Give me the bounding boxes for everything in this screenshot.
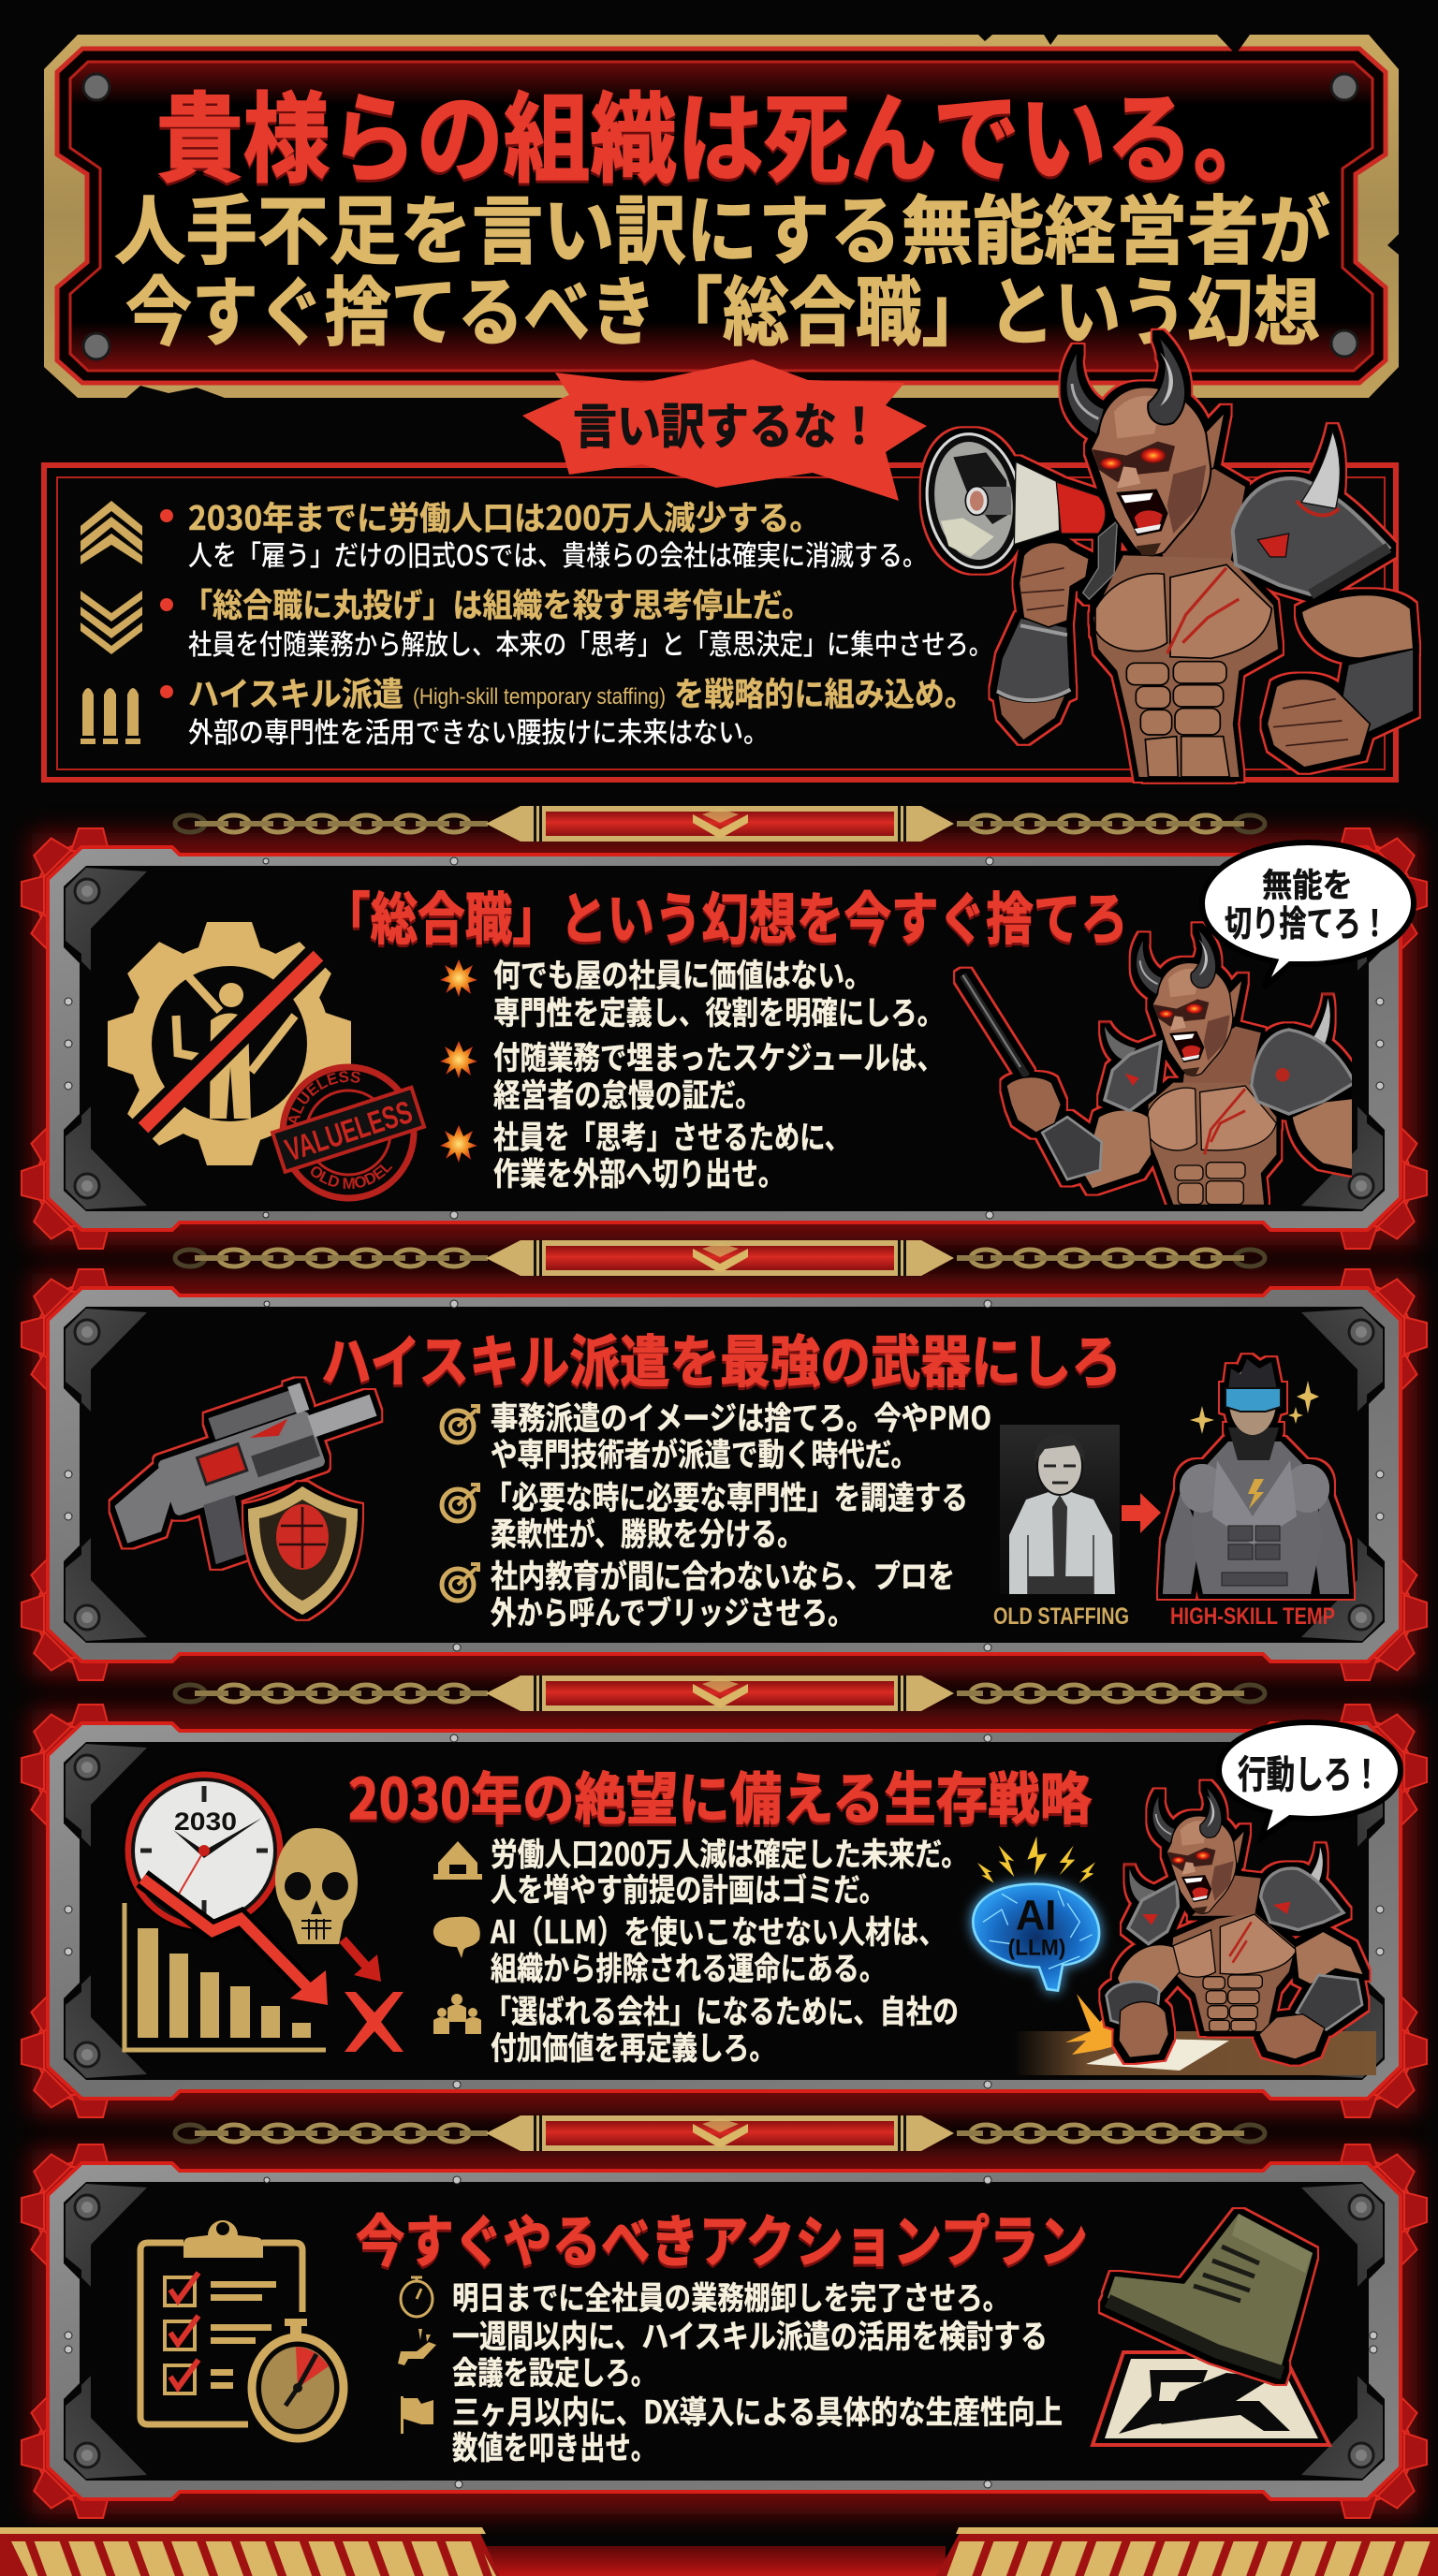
icon: chevrons down xyxy=(81,591,142,654)
title line 3: 今すぐ捨てるべき「総合職」という幻想 xyxy=(125,253,1320,361)
demon body xyxy=(1107,1786,1364,2059)
callout: burst xyxy=(522,359,927,501)
panel 1 bullets: 作業を外部へ切り出せ。 xyxy=(493,1149,785,1194)
icon: crossed-out gear xyxy=(108,922,351,1165)
illustration: old staffing worker xyxy=(1000,1425,1120,1594)
icon: temple xyxy=(433,1841,482,1880)
panel 2 bullets: 事務派遣のイメージは捨てろ。今やPMO xyxy=(491,1393,991,1439)
illustration: crumpled paper xyxy=(1093,2352,1329,2445)
panel 1 bullets: 付随業務で埋まったスケジュールは、 xyxy=(493,1032,944,1078)
intro text 2: 「総合職に丸投げ」は組織を殺す思考停止だ。 xyxy=(183,579,812,627)
intro text 3: ハイスキル派遣 xyxy=(188,668,404,716)
panel: ハイスキル派遣 frame xyxy=(22,1269,1427,1680)
illustration: boot xyxy=(1108,2214,1313,2373)
panel 4 bullets: 数値を叩き出せ。 xyxy=(452,2422,656,2468)
stamp: valueless: VALUELESS xyxy=(286,1071,360,1126)
panel 2 heading: ハイスキル派遣を最強の武器にしろ xyxy=(321,1317,1122,1398)
speech bubble: 行動しろ xyxy=(1219,1722,1401,1837)
panel 3 bullets: AI（LLM）を使いこなせない人材は、 xyxy=(490,1907,946,1953)
intro text 1: 2030年までに労働人口は200万人減少する。 xyxy=(188,492,821,540)
speech bubble: 無能を切り捨てろ xyxy=(1202,842,1414,988)
icon: 2030 clock: 2030 xyxy=(174,1808,237,1836)
stamp: valueless: OLD MODEL xyxy=(311,1164,393,1189)
brain xyxy=(973,1884,1099,1991)
sparkles xyxy=(1190,1381,1319,1434)
arrow: small xyxy=(343,1939,381,1982)
divider 3 xyxy=(175,1676,1265,1711)
panel: 2030 frame xyxy=(22,1705,1427,2117)
panel: intro box xyxy=(44,465,1396,780)
panel: action plan frame xyxy=(22,2144,1427,2518)
panel 4 bullets: 三ヶ月以内に、DX導入による具体的な生産性向上 xyxy=(452,2387,1063,2433)
icon: stopwatch small xyxy=(401,2277,433,2317)
icon: people xyxy=(433,1994,481,2034)
footer hazard band xyxy=(0,2527,1438,2576)
panel 4 bullets: 明日までに全社員の業務棚卸しを完了させろ。 xyxy=(452,2273,1009,2319)
intro text 1 detail: 人を「雇う」だけの旧式OSでは、貴様らの会社は確実に消滅する。 xyxy=(188,533,927,574)
panel: title frame xyxy=(44,35,1399,398)
panel 4 bullets: 会議を設定しろ。 xyxy=(452,2348,656,2393)
panel 3 heading: 2030年の絶望に備える生存戦略 xyxy=(348,1754,1092,1836)
stamp: valueless xyxy=(270,1063,427,1202)
label: old staffing: OLD STAFFING xyxy=(993,1603,1129,1630)
panel 3 bullets xyxy=(433,1829,968,2069)
panel 1 bullets: 専門性を定義し、役割を明確にしろ。 xyxy=(493,988,944,1033)
panel 3 bullets: 労働人口200万人減は確定した未来だ。 xyxy=(491,1829,968,1875)
paper xyxy=(1086,2039,1229,2071)
panel 4 bullets xyxy=(398,2273,1063,2468)
arrow: falling trend red xyxy=(142,1879,328,2005)
panel 3 bullets: 組織から排除される運命にある。 xyxy=(491,1943,886,1989)
illustration: high-skill temp xyxy=(1163,1359,1349,1594)
title line 2: 人手不足を言い訳にする無能経営者が xyxy=(114,171,1330,280)
intro text 3: (High-skill temporary staffing) xyxy=(413,684,666,710)
panel 1 bullets xyxy=(440,950,944,1194)
callout: burst: 言い訳するな！ xyxy=(573,388,881,458)
red bullet dots xyxy=(160,509,173,698)
bar chart xyxy=(125,1903,326,2050)
intro text 3 detail: 外部の専門性を活用できない腰抜けに未来はない。 xyxy=(188,710,769,751)
speech bubble: 行動しろ: 行動しろ！ xyxy=(1238,1743,1381,1799)
panel 2 bullets xyxy=(442,1393,991,1633)
panel 2 bullets: 外から呼んでブリッジさせろ。 xyxy=(491,1588,854,1633)
icon: AI brain xyxy=(973,1837,1099,1991)
arrow xyxy=(1122,1493,1161,1533)
intro text 2 detail: 社員を付随業務から解放し、本来の「思考」と「意思決定」に集中させろ。 xyxy=(188,622,992,663)
panel 1 heading: 「総合職」という幻想を今すぐ捨てろ xyxy=(323,874,1128,956)
panel 1 bullets: 社員を「思考」させるために、 xyxy=(493,1112,850,1158)
panel 1 bullets: 何でも屋の社員に価値はない。 xyxy=(493,950,872,996)
panel 3 bullets: 付加価値を再定義しろ。 xyxy=(491,2023,775,2069)
icon: futuristic rifle xyxy=(96,1363,405,1589)
icon: stopwatch xyxy=(252,2319,344,2438)
icon: bullets xyxy=(81,688,140,744)
panel 4 heading: 今すぐやるべきアクションプラン xyxy=(356,2197,1088,2278)
panel 1 bullets: 経営者の怠慢の証だ。 xyxy=(493,1070,762,1116)
stamp: valueless: VALUELESS xyxy=(281,1094,417,1168)
lightning bolts xyxy=(977,1837,1095,1883)
intro text 3: を戦略的に組み込め。 xyxy=(674,668,975,716)
panel 3 bullets: 「選ばれる会社」になるために、自社の xyxy=(485,1986,959,2032)
icon: clipboard xyxy=(140,2220,302,2424)
icon: flag xyxy=(401,2396,433,2434)
arrow: falling trend shadow xyxy=(142,1879,314,1994)
divider 4 xyxy=(175,2115,1265,2151)
panel: 総合職 frame xyxy=(22,828,1427,1249)
spark xyxy=(1065,1994,1119,2055)
speech bubble: 無能を切り捨てろ: 無能を xyxy=(1262,859,1353,907)
panel 2 bullets: 柔軟性が、勝敗を分ける。 xyxy=(491,1509,803,1555)
title line 1: 貴様らの組織は死んでいる。 xyxy=(156,60,1280,201)
divider 2 xyxy=(175,1240,1265,1276)
demon with pointer xyxy=(962,929,1355,1205)
label: high-skill temp: HIGH-SKILL TEMP xyxy=(1170,1603,1335,1630)
icon: brain xyxy=(433,1917,480,1958)
panel 3 bullets: 人を増やす前提の計画はゴミだ。 xyxy=(491,1865,886,1910)
screws xyxy=(83,74,1357,359)
label AI: AI xyxy=(1016,1892,1056,1939)
icon: skull xyxy=(275,1828,358,1944)
intro text 3 xyxy=(188,668,975,716)
label LLM: (LLM) xyxy=(1008,1935,1065,1960)
icon: red x xyxy=(345,1992,404,2052)
icon: chevrons up xyxy=(81,501,142,564)
divider 1 xyxy=(175,806,1265,842)
panel 2 bullets: や専門技術者が派遣で動く時代だ。 xyxy=(491,1429,917,1475)
speech bubble: 無能を切り捨てろ: 切り捨てろ！ xyxy=(1225,895,1388,946)
panel 2 bullets: 社内教育が間に合わないなら、プロを xyxy=(491,1551,955,1597)
icon: 2030 clock xyxy=(124,1770,285,1931)
demon with megaphone xyxy=(918,335,1414,777)
panel 2 bullets: 「必要な時に必要な専門性」を調達する xyxy=(485,1472,968,1518)
icon: handshake hand xyxy=(398,2329,436,2365)
panel 4 bullets: 一週間以内に、ハイスキル派遣の活用を検討する xyxy=(452,2311,1048,2357)
demon pounding the table xyxy=(1014,1786,1376,2075)
icon: brain shield xyxy=(248,1486,358,1615)
table xyxy=(1014,2031,1376,2075)
